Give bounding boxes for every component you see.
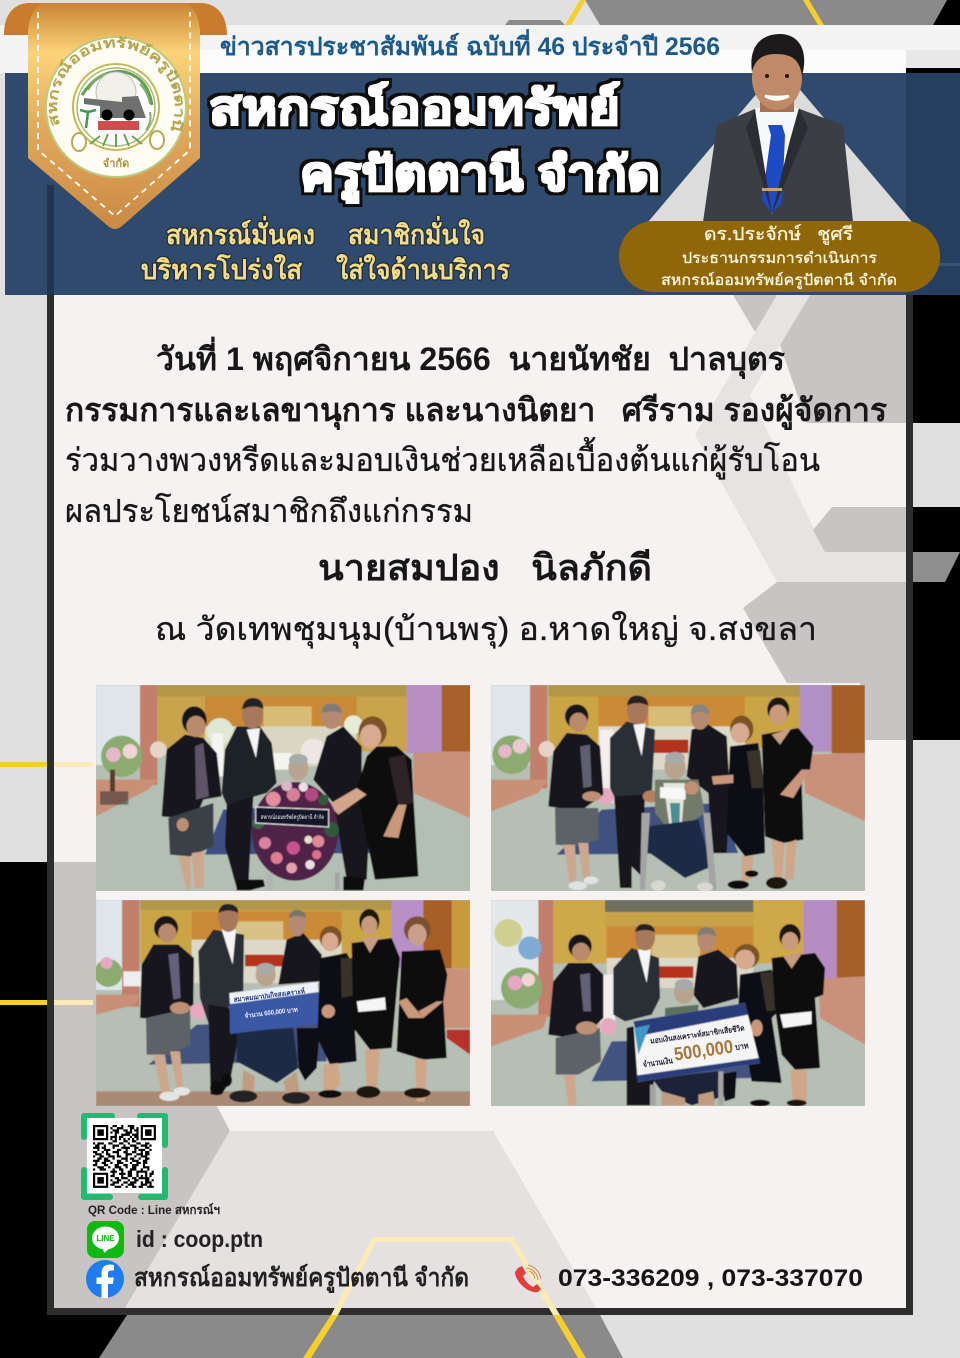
ribbon badge <box>4 3 227 229</box>
blue board text: สมาคมฌาปนกิจสงเคราะห์ <box>233 986 306 1004</box>
phone numbers: 073-336209 , 073-337070 <box>558 1265 863 1292</box>
motto <box>141 215 510 285</box>
cooperative seal logo <box>45 36 187 178</box>
photo 4: large white cheque board <box>491 900 865 1106</box>
seal name text: สหกรณ์ออมทรัพย์ครูปัตตานี <box>48 36 184 132</box>
Facebook page name: สหกรณ์ออมทรัพย์ครูปัตตานี จำกัด <box>134 1263 469 1294</box>
white board text: มอบเงินสงเคราะห์สมาชิกเสียชีวิต <box>650 1024 745 1046</box>
news body text: ผลประโยชน์สมาชิกถึงแก่กรรม <box>65 493 473 529</box>
news body text: ร่วมวางพวงหรีดและมอบเงินช่วยเหลือเบื้องต้นแก่ผู้รับโอน <box>65 437 820 480</box>
newsletter issue line: ข่าวสารประชาสัมพันธ์ ฉบับที่ 46 ประจำปี 2566 <box>220 29 720 61</box>
motto: สหกรณ์มั่นคง <box>166 215 315 250</box>
white board text: บาท <box>735 1040 750 1052</box>
photo 1: wreath laying <box>96 685 470 891</box>
QR caption: QR Code : Line สหกรณ์ฯ <box>88 1203 220 1217</box>
news body text <box>65 336 887 649</box>
news body text: นายสมปอง นิลภักดี <box>318 547 652 588</box>
white board text: 500,000 <box>673 1036 734 1065</box>
title: ครูปัตตานี จำกัด <box>300 147 660 204</box>
header band <box>5 73 960 295</box>
icon: LINE <box>87 1221 124 1258</box>
LINE id: id : coop.ptn <box>136 1226 263 1252</box>
president portrait <box>648 34 912 222</box>
QR corner brackets <box>84 1116 165 1197</box>
wreath banner text: สหกรณ์ออมทรัพย์ครูปัตตานี จำกัด <box>261 813 324 821</box>
icon: Facebook <box>86 1260 124 1298</box>
blue board text: จำนวน 600,000 บาท <box>244 1005 299 1020</box>
title: สหกรณ์ออมทรัพย์ <box>209 81 620 134</box>
photo 2: handing envelope <box>491 685 865 891</box>
news body text: กรรมการและเลขานุการ และนางนิตยา ศรีราม รองผู้จัดการ <box>65 392 887 431</box>
title <box>209 81 660 204</box>
white board text <box>642 1024 750 1069</box>
photo 3: blue cheque board <box>96 900 470 1106</box>
icon: LINE: LINE <box>96 1234 115 1243</box>
motto: สมาชิกมั่นใจ <box>348 215 485 250</box>
president name pill: ประธานกรรมการดำเนินการ <box>682 250 877 267</box>
icon: telephone <box>515 1265 541 1292</box>
president name pill: สหกรณ์ออมทรัพย์ครูปัตตานี จำกัด <box>661 272 897 289</box>
president name pill: ดร.ประจักษ์ ชูศรี <box>704 224 853 245</box>
motto: บริหารโปร่งใส <box>141 253 302 285</box>
white board text: จำนวนเงิน <box>642 1055 674 1069</box>
motto: ใส่ใจด้านบริการ <box>336 254 510 285</box>
news body text: ณ วัดเทพชุมนุม(บ้านพรุ) อ.หาดใหญ่ จ.สงขลา <box>155 611 817 649</box>
QR code <box>84 1116 165 1197</box>
news body text: วันที่ 1 พฤศจิกายน 2566 นายนัทชัย ปาลบุตร <box>156 336 785 380</box>
seal limited text: จำกัด <box>103 157 129 170</box>
president name pill <box>619 221 940 292</box>
blue board text <box>233 986 306 1020</box>
